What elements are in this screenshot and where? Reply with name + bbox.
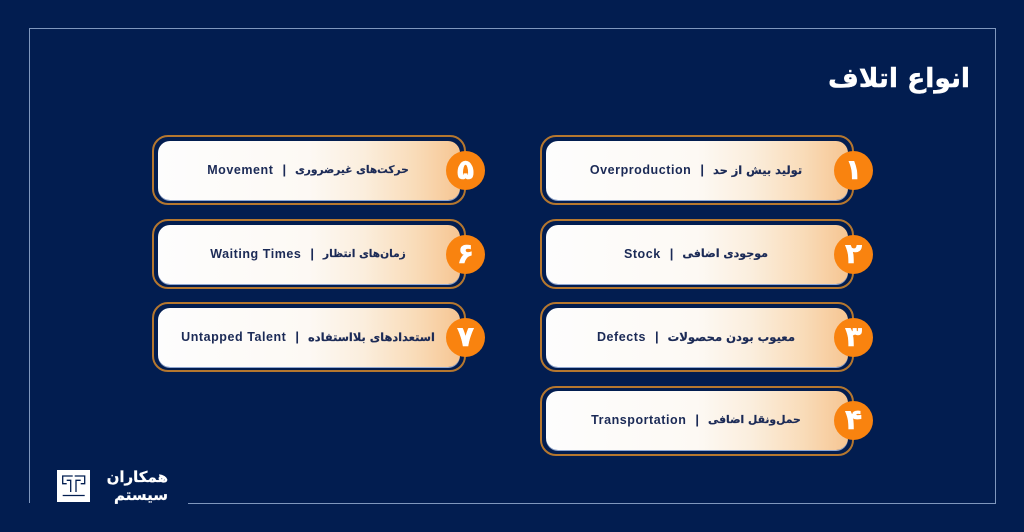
- label 2: |: [670, 246, 673, 261]
- number 4: ۴: [845, 403, 862, 436]
- number 2: ۲: [845, 237, 862, 270]
- item 6: waiting times: [152, 219, 485, 289]
- item 7: untapped talent: [152, 302, 485, 372]
- label 6: Waiting Times: [210, 246, 301, 260]
- label 2: [624, 246, 768, 261]
- item 1: overproduction: [540, 135, 873, 205]
- item 4: transportation: [540, 386, 873, 456]
- label 5: Movement: [207, 162, 273, 176]
- label 4: [591, 412, 801, 427]
- label 1: تولید بیش از حد: [713, 162, 802, 176]
- label 6: |: [310, 246, 314, 261]
- brand name: [107, 468, 168, 504]
- number 7: ۷: [457, 320, 474, 353]
- label 1: |: [700, 162, 704, 177]
- label 3: Defects: [597, 330, 646, 344]
- label 6: زمان‌های انتظار: [323, 248, 406, 260]
- label 3: [597, 329, 795, 344]
- label 2: Stock: [624, 246, 661, 260]
- label 7: |: [295, 329, 299, 344]
- brand name: سیستم: [114, 486, 168, 504]
- number 1: ۱: [845, 153, 862, 186]
- label 2: موجودی اضافی: [682, 247, 768, 260]
- number 5: [446, 151, 485, 190]
- title: انواع اتلاف: [828, 63, 970, 94]
- label 3: |: [655, 329, 659, 344]
- label 3: معیوب بودن محصولات: [668, 330, 795, 344]
- number 6: ۶: [457, 237, 474, 270]
- label 5: [207, 162, 409, 177]
- logo mark: [57, 470, 90, 502]
- item 2: stock: [540, 219, 873, 289]
- label 5: حرکت‌های غیرضروری: [295, 164, 409, 176]
- label 1: [590, 162, 802, 178]
- number 3: ۳: [845, 320, 862, 353]
- label 5: |: [282, 162, 286, 177]
- item 3: defects: [540, 302, 873, 372]
- brand name: همکاران: [107, 468, 168, 486]
- number 3: [834, 318, 873, 357]
- label 1: Overproduction: [590, 162, 691, 176]
- number 4: [834, 401, 873, 440]
- label 4: Transportation: [591, 412, 686, 426]
- label 7: استعدادهای بلااستفاده: [308, 330, 435, 344]
- number 5: ۵: [457, 153, 474, 186]
- number 1: [834, 151, 873, 190]
- number 6: [446, 235, 485, 274]
- label 4: حمل‌ونقل اضافی: [708, 413, 801, 426]
- label 7: [181, 329, 435, 344]
- label 4: |: [695, 412, 699, 427]
- item 5: movement: [152, 135, 485, 205]
- label 6: [210, 246, 406, 261]
- number 2: [834, 235, 873, 274]
- label 7: Untapped Talent: [181, 330, 286, 344]
- number 7: [446, 318, 485, 357]
